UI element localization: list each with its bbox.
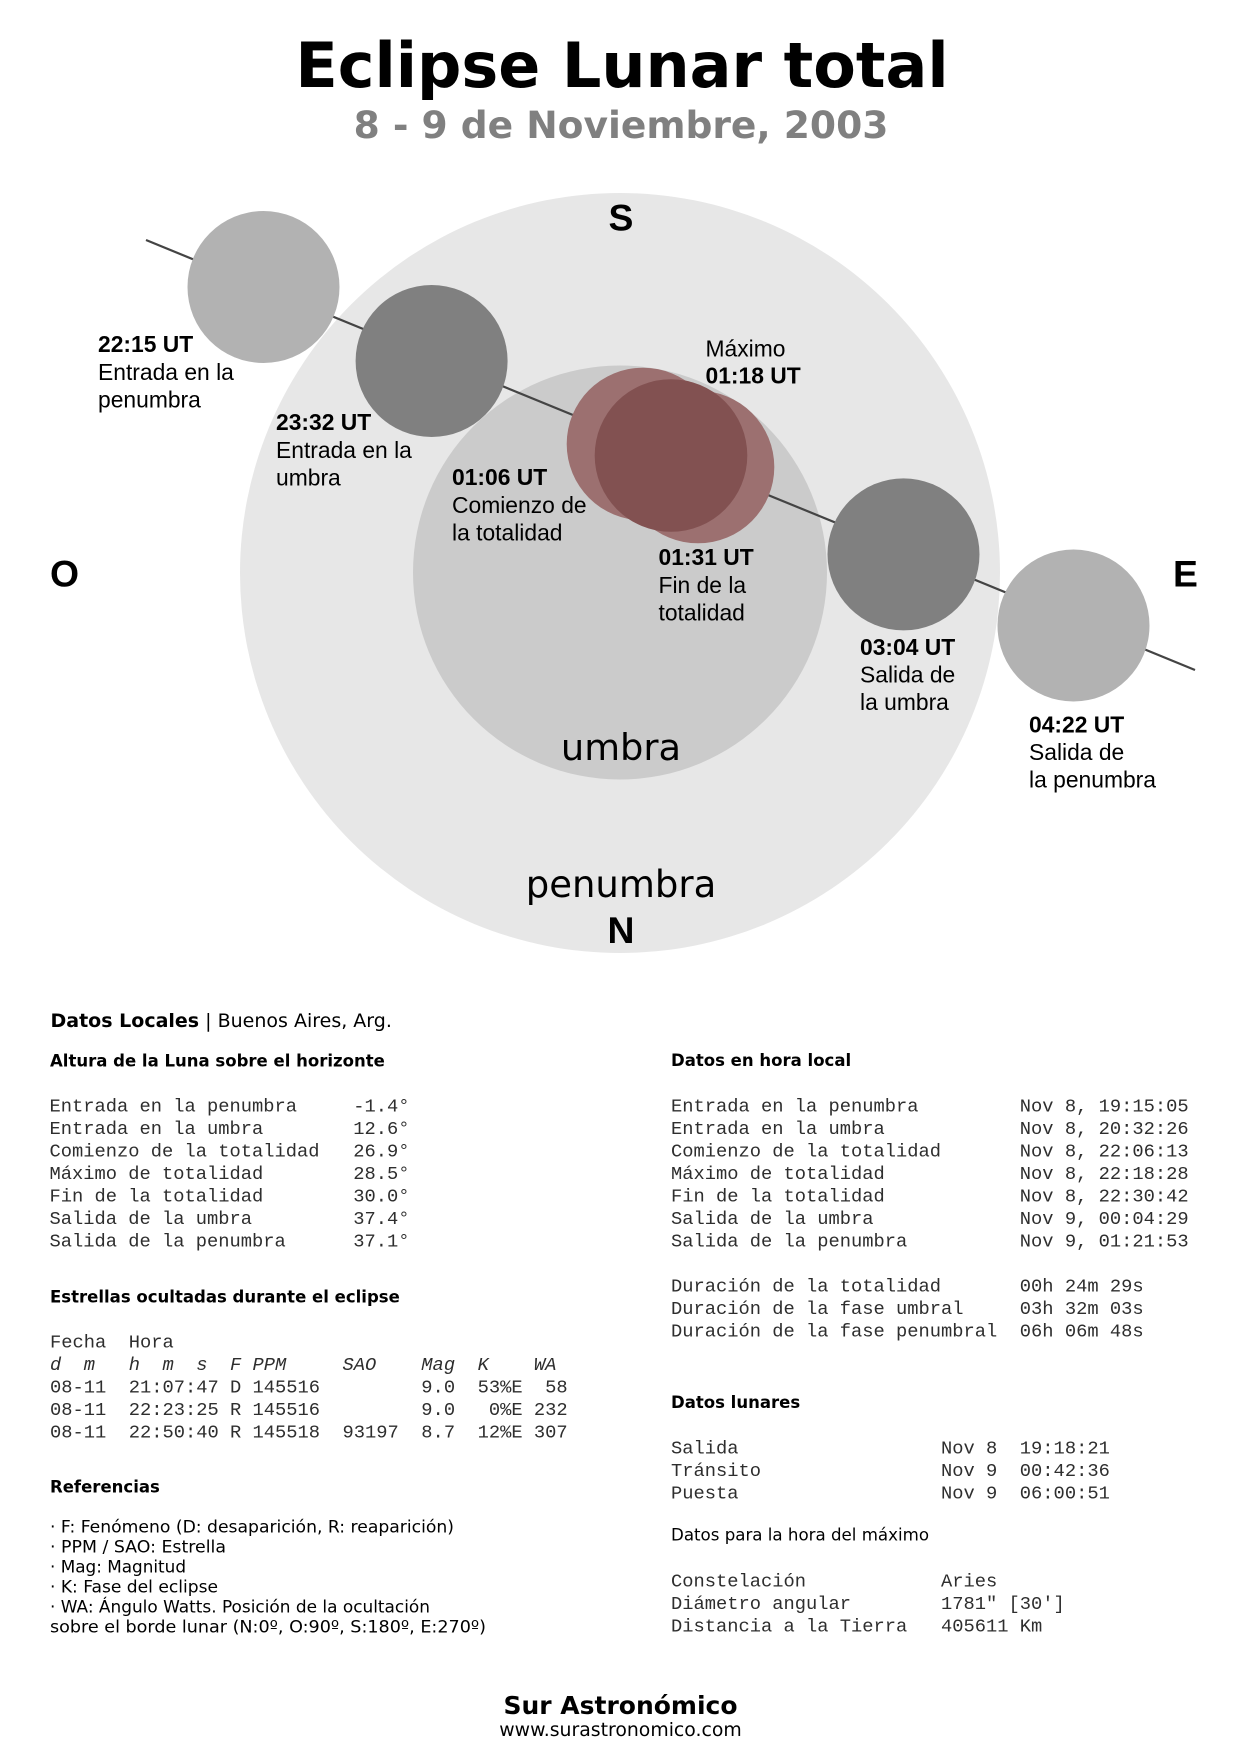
moon rise and set table: Puesta Nov 9 06:00:51 — [671, 1482, 1110, 1504]
moon: end of totality — [622, 391, 774, 543]
footer — [499, 1691, 742, 1741]
section: occulted stars — [50, 1288, 568, 1444]
altitude table: Salida de la penumbra 37.1° — [50, 1231, 410, 1253]
section: moon altitude — [50, 1052, 410, 1253]
references list — [50, 1518, 486, 1638]
time label: 22:15: Entrada en la — [98, 359, 234, 385]
time label: 22:15 — [98, 331, 234, 412]
local time table: Comienzo de la totalidad Nov 8, 22:06:13 — [671, 1141, 1189, 1163]
heading: references: Referencias — [50, 1478, 160, 1496]
time label: 04:22 — [1029, 711, 1156, 793]
occultation table: 08-11 22:23:25 R 145516 9.0 0%E 232 — [50, 1399, 568, 1421]
time label: 03:04: 03:04 UT — [860, 634, 955, 660]
time label: 01:06: Comienzo de — [452, 492, 587, 518]
references list: sobre el borde lunar (N:0º, O:90º, S:180º, E:270º) — [50, 1618, 486, 1638]
references list: · Mag: Magnitud — [50, 1558, 186, 1578]
references list: · K: Fase del eclipse — [50, 1578, 218, 1598]
altitude table: Salida de la umbra 37.4° — [50, 1208, 410, 1230]
maximum data table: Distancia a la Tierra 405611 Km — [671, 1616, 1042, 1638]
moon rise and set table — [671, 1438, 1110, 1504]
maximum data table: Diámetro angular 1781" [30'] — [671, 1593, 1065, 1615]
time label: 23:32: Entrada en la — [276, 437, 412, 463]
subtitle: 8 - 9 de Noviembre, 2003 — [354, 103, 888, 147]
time label: 03:04: Salida de — [860, 662, 955, 688]
moon: entering penumbra — [188, 211, 340, 363]
time label: 01:06: la totalidad — [452, 520, 562, 546]
time label: 01:31 — [658, 544, 754, 626]
time label: 04:22: la penumbra — [1029, 767, 1156, 793]
penumbra disc — [240, 193, 1000, 953]
moon: maximum — [595, 379, 747, 532]
moon: leaving umbra — [828, 478, 980, 630]
time label: 23:32: umbra — [276, 464, 341, 490]
time label: 22:15: 22:15 UT — [98, 331, 193, 357]
local time table: Entrada en la penumbra Nov 8, 19:15:05 — [671, 1096, 1189, 1118]
footer: brand: Sur Astronómico — [503, 1691, 738, 1720]
local time table: Salida de la penumbra Nov 9, 01:21:53 — [671, 1231, 1189, 1253]
occultation table: 08-11 21:07:47 D 145516 9.0 53%E 58 — [50, 1376, 568, 1398]
time label: 03:04 — [860, 634, 955, 715]
time label: 23:32: 23:32 UT — [276, 409, 371, 435]
label: south: S — [609, 196, 633, 238]
heading: lunar data: Datos lunares — [671, 1393, 800, 1412]
label: east: E — [1173, 553, 1198, 595]
title: Eclipse Lunar total — [295, 29, 949, 102]
heading: occulted stars: Estrellas ocultadas durante el eclipse — [50, 1288, 400, 1306]
section: local time data — [671, 1051, 1189, 1343]
time label: 01:06 — [452, 464, 587, 546]
altitude table: Entrada en la penumbra -1.4° — [50, 1096, 410, 1118]
label: north: N — [608, 909, 634, 951]
subheading: data at maximum: Datos para la hora del máximo — [671, 1526, 929, 1546]
time label: 23:32 — [276, 409, 412, 490]
references list: · F: Fenómeno (D: desaparición, R: reaparición) — [50, 1518, 454, 1538]
occultation table: d m h m s F PPM SAO Mag K WA — [50, 1354, 556, 1376]
altitude table: Comienzo de la totalidad 26.9° — [50, 1141, 410, 1163]
altitude table: Fin de la totalidad 30.0° — [50, 1186, 410, 1208]
time label: maximum 01:18: Máximo — [706, 336, 785, 362]
time label: 04:22: 04:22 UT — [1029, 711, 1124, 737]
heading: local data: Datos Locales | Buenos Aires, Arg. — [50, 1010, 392, 1032]
references list: · PPM / SAO: Estrella — [50, 1538, 226, 1558]
occultation table: 08-11 22:50:40 R 145518 93197 8.7 12%E 307 — [50, 1422, 568, 1444]
local time table: Entrada en la umbra Nov 8, 20:32:26 — [671, 1118, 1189, 1140]
occultation table: Fecha Hora — [50, 1332, 174, 1354]
local time table: Máximo de totalidad Nov 8, 22:18:28 — [671, 1163, 1189, 1185]
time label: maximum 01:18: 01:18 UT — [706, 362, 801, 388]
time label: 22:15: penumbra — [98, 386, 201, 412]
label: umbra: umbra — [561, 726, 681, 769]
umbra disc — [413, 366, 827, 780]
durations table: Duración de la fase umbral 03h 32m 03s — [671, 1298, 1144, 1320]
occultation table — [50, 1332, 568, 1444]
section: references — [50, 1478, 486, 1638]
altitude table: Entrada en la umbra 12.6° — [50, 1118, 410, 1140]
altitude table: Máximo de totalidad 28.5° — [50, 1163, 410, 1185]
durations table: Duración de la totalidad 00h 24m 29s — [671, 1276, 1144, 1298]
time label: 01:31: Fin de la — [658, 572, 746, 598]
footer: website: www.surastronomico.com — [499, 1720, 742, 1741]
time label: 01:31: totalidad — [658, 600, 745, 626]
altitude table — [50, 1096, 410, 1253]
moon path line — [146, 240, 1195, 670]
heading: local time data: Datos en hora local — [671, 1051, 851, 1070]
heading: moon altitude: Altura de la Luna sobre el horizonte — [50, 1052, 385, 1070]
local time table: Salida de la umbra Nov 9, 00:04:29 — [671, 1208, 1189, 1230]
moon rise and set table: Salida Nov 8 19:18:21 — [671, 1438, 1110, 1460]
moon: leaving penumbra — [998, 550, 1150, 702]
time label: 01:06: 01:06 UT — [452, 464, 547, 490]
durations table: Duración de la fase penumbral 06h 06m 48s — [671, 1321, 1144, 1343]
maximum data table — [671, 1570, 1065, 1638]
label: penumbra: penumbra — [526, 863, 716, 906]
local time table — [671, 1096, 1189, 1253]
durations table — [671, 1276, 1144, 1343]
time label: maximum 01:18 — [706, 336, 801, 388]
eclipse diagram — [50, 193, 1198, 953]
references list: · WA: Ángulo Watts. Posición de la ocultación — [50, 1596, 430, 1618]
moon: start of totality — [567, 368, 719, 520]
moon: entering umbra — [356, 285, 508, 437]
time label: 04:22: Salida de — [1029, 739, 1124, 765]
local time table: Fin de la totalidad Nov 8, 22:30:42 — [671, 1186, 1189, 1208]
time label: 01:31: 01:31 UT — [658, 544, 754, 570]
time label: 03:04: la umbra — [860, 689, 949, 715]
moon rise and set table: Tránsito Nov 9 00:42:36 — [671, 1460, 1110, 1482]
label: west: O — [50, 553, 79, 595]
maximum data table: Constelación Aries — [671, 1570, 997, 1592]
section: lunar data — [671, 1393, 1110, 1638]
